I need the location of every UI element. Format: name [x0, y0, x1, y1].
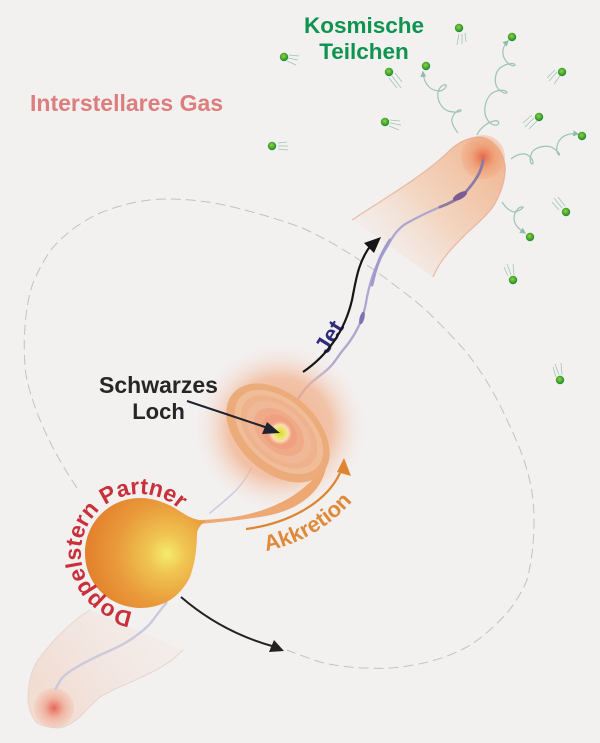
label: Interstellares Gas: Interstellares Gas [30, 90, 223, 116]
label: Schwarzes Loch: Schwarzes [99, 372, 218, 398]
label: Akkretion: Akkretion [266, 496, 352, 551]
arrow: to black hole [187, 401, 280, 434]
cosmic ray tracks [423, 41, 578, 233]
accretion disc [194, 344, 366, 524]
accretion stream from companion star [200, 468, 326, 524]
lower lobe hot spot [34, 688, 74, 728]
jet stream [210, 160, 483, 513]
orbit: dashed ellipse [24, 199, 534, 668]
disc halo [194, 344, 366, 512]
label: Doppelstern Partner: Doppelstern Partner [65, 479, 187, 628]
lower jet lobe [28, 602, 183, 728]
label: Jet: Jet [309, 315, 349, 358]
arrow: jet [303, 237, 381, 372]
label: Schwarzes Loch: Loch [132, 399, 185, 424]
companion star [85, 498, 206, 608]
disc body [207, 364, 349, 502]
label: Kosmische Teilchen: Teilchen [319, 39, 409, 64]
arrow: orbital motion [181, 597, 284, 652]
upper jet lobe [352, 135, 505, 277]
upper lobe hot spot [461, 135, 505, 179]
lower jet stream [55, 602, 167, 690]
label: Kosmische Teilchen: Kosmische [304, 13, 424, 38]
black hole core [268, 421, 292, 445]
cosmic particles [268, 24, 586, 384]
arrow: accretion [246, 458, 351, 529]
